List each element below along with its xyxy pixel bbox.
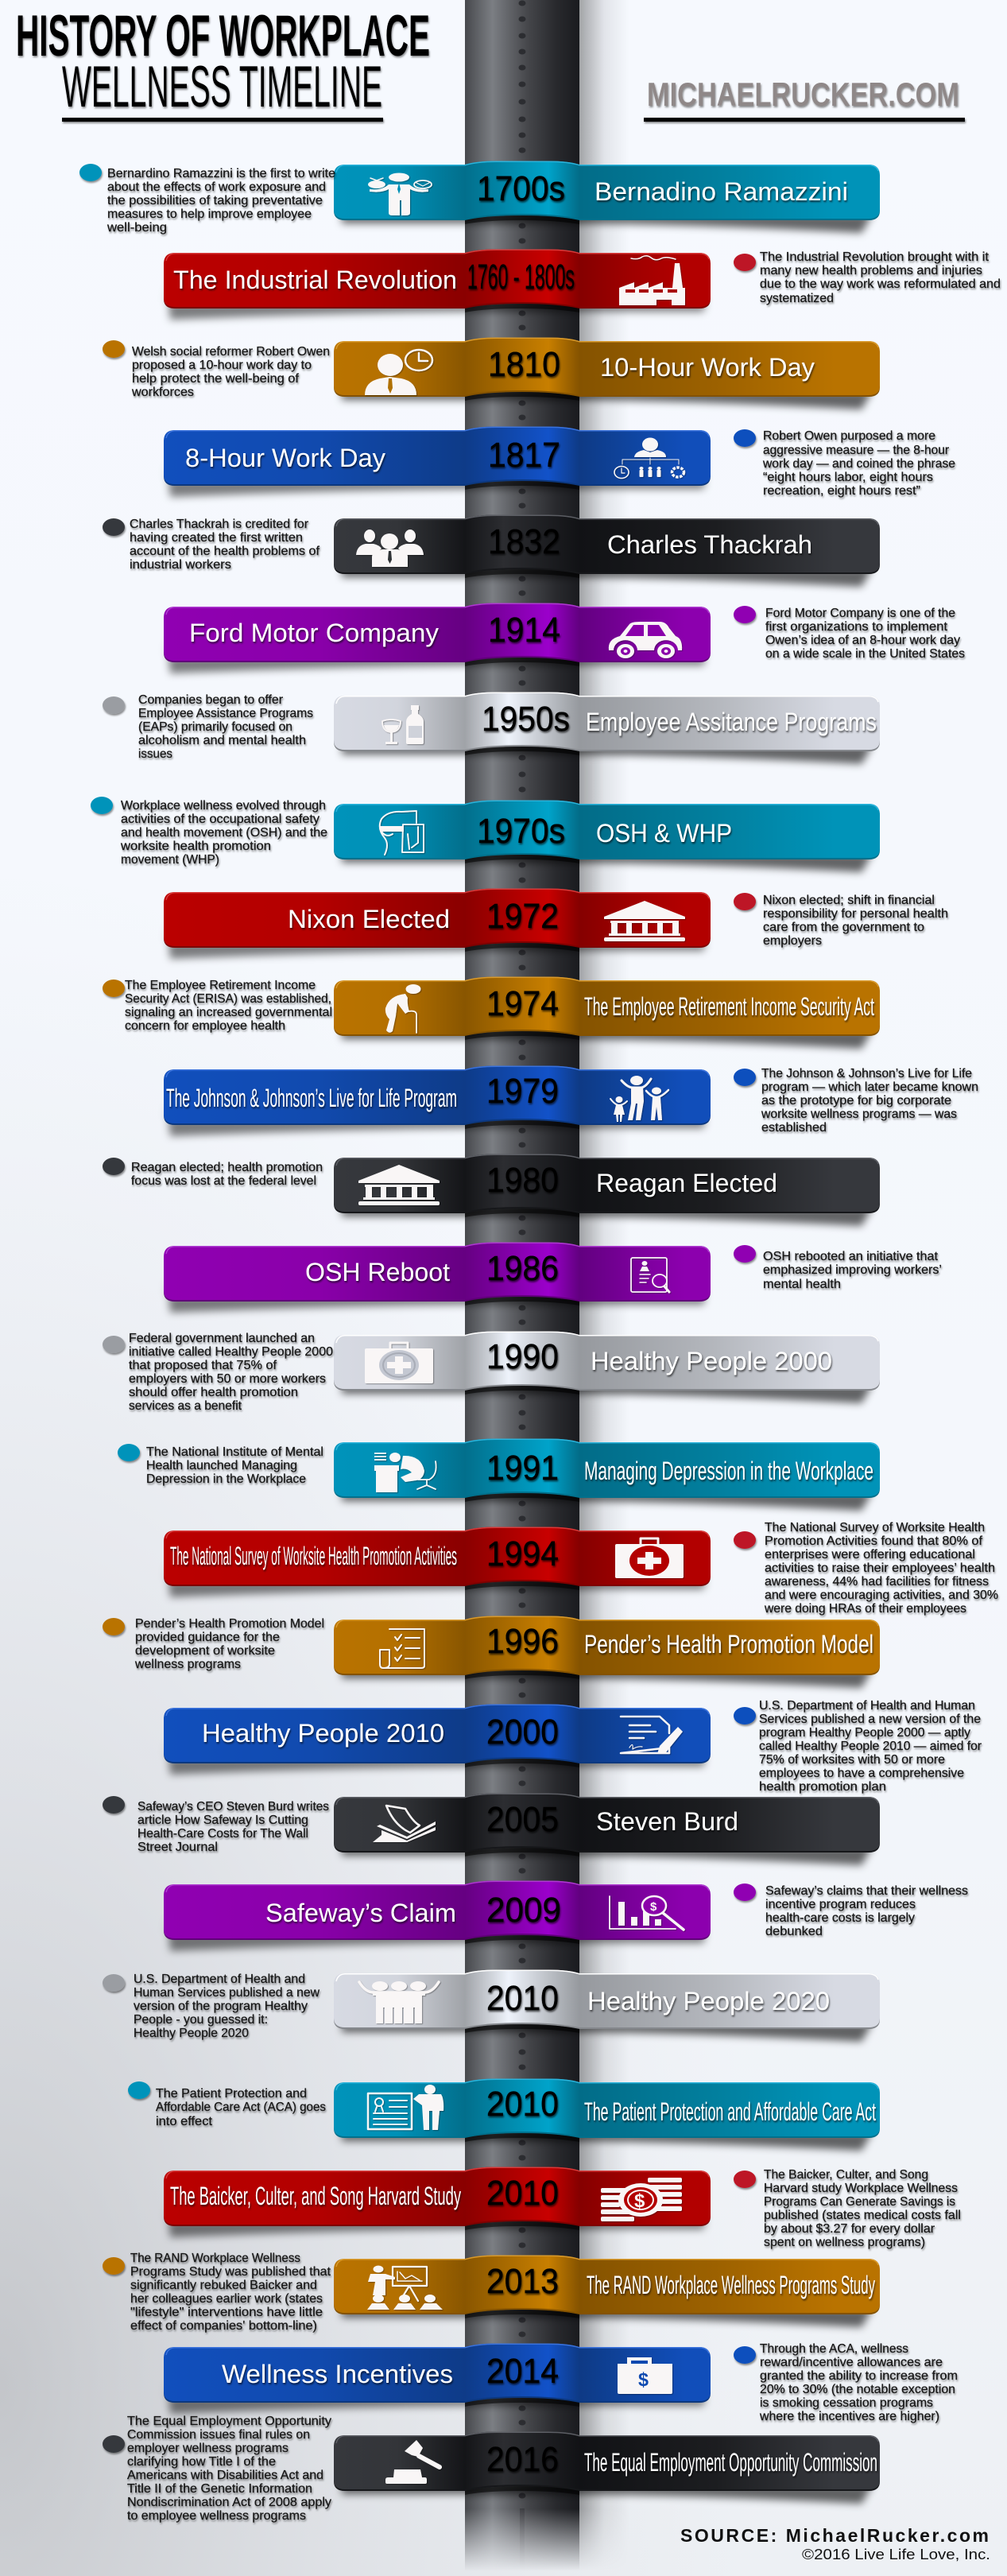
banner — [334, 692, 880, 764]
description: having created the first written — [130, 531, 303, 545]
description: were doing HRAs of their employees — [764, 1602, 966, 1616]
description — [103, 1332, 333, 1413]
description — [91, 797, 327, 867]
panel: Pender's Health Promotion Model — [103, 1616, 880, 1688]
icon: org chart — [614, 437, 684, 479]
icon: document with magnifier — [631, 1258, 669, 1292]
year: 1832 — [488, 522, 560, 561]
description: Owen’s idea of an 8-hour work day — [765, 634, 960, 647]
description: Americans with Disabilities Act and — [127, 2469, 323, 2482]
heading: 10-Hour Work Day — [600, 353, 815, 382]
icon: gavel — [385, 2440, 440, 2484]
banner — [334, 1331, 880, 1403]
description: Programs Study was published that — [130, 2265, 331, 2279]
description: incentive program reduces — [765, 1898, 916, 1911]
panel: OSH Reboot — [164, 1242, 942, 1313]
heading: The Baicker, Culter, and Song Harvard Study — [170, 2182, 461, 2210]
description: The Patient Protection and — [156, 2087, 307, 2101]
description: Ford Motor Company is one of the — [765, 607, 955, 620]
year: 2000 — [486, 1713, 559, 1752]
description: Human Services published a new — [134, 1986, 320, 2000]
description: employers — [763, 934, 822, 948]
description: Employee Assistance Programs — [138, 707, 313, 720]
description — [734, 1699, 982, 1794]
description: movement (WHP) — [121, 853, 219, 867]
description: services as a benefit — [129, 1399, 242, 1413]
banner — [334, 1794, 880, 1865]
year: 1990 — [486, 1337, 559, 1376]
year: 2005 — [486, 1800, 559, 1839]
description: where the incentives are higher) — [759, 2410, 939, 2423]
heading: Reagan Elected — [596, 1169, 777, 1197]
description: alcoholism and mental health — [138, 734, 306, 747]
heading: Nixon Elected — [288, 905, 450, 933]
description: worksite health promotion — [120, 840, 271, 853]
icon: document and pen — [621, 1717, 683, 1754]
description: The Equal Employment Opportunity — [127, 2415, 331, 2428]
heading: Charles Thackrah — [607, 530, 812, 559]
description: Services published a new version of the — [759, 1713, 981, 1726]
description: employer wellness programs — [127, 2442, 289, 2455]
icon: group of people arms linked — [359, 1981, 439, 2023]
panel: ERISA — [103, 976, 880, 1049]
icon: briefcase with dollar: $ — [638, 2369, 649, 2391]
year: 1996 — [486, 1622, 559, 1661]
description — [103, 1158, 323, 1188]
panel: Healthy People 2020 — [103, 1970, 880, 2042]
description: Bernardino Ramazzini is the first to write — [107, 167, 335, 180]
title: WELLNESS TIMELINE — [62, 55, 382, 119]
description: Robert Owen purposed a more — [763, 429, 935, 443]
description: Security Act (ERISA) was established, — [125, 992, 331, 1006]
description — [103, 2415, 331, 2523]
banner — [334, 1154, 880, 1226]
description: article How Safeway Is Cutting — [137, 1814, 308, 1827]
description: 75% of worksites with 50 or more — [759, 1753, 945, 1767]
panel: RAND Workplace Wellness Programs Study — [103, 2252, 880, 2333]
icon: chart with magnifier: $ — [650, 1900, 657, 1914]
heading: 8-Hour Work Day — [185, 444, 385, 472]
panel: Safeway's Claim — [164, 1881, 968, 1951]
description: by about $3.27 for every dollar — [764, 2222, 935, 2236]
panel: Affordable Care Act — [128, 2078, 880, 2151]
heading: The Industrial Revolution — [173, 266, 457, 294]
icon: elderly person with cane — [385, 984, 421, 1033]
year: 2010 — [486, 1979, 559, 2018]
description — [103, 340, 330, 399]
description — [103, 693, 313, 761]
heading: The Johnson & Johnson’s Live for Life Program — [166, 1084, 457, 1112]
description: development of worksite — [135, 1644, 275, 1658]
description — [103, 1973, 320, 2040]
heading: Employee Assitance Programs — [586, 708, 877, 736]
description: responsibility for personal health — [763, 907, 948, 921]
description — [128, 2081, 326, 2128]
description — [103, 1617, 324, 1671]
panel: Equal Employment Opportunity Commission — [103, 2415, 880, 2523]
description: The RAND Workplace Wellness — [130, 2252, 300, 2265]
description: published (states medical costs fall — [764, 2209, 961, 2222]
description: account of the health problems of — [130, 545, 320, 558]
icon: slumped person at desk — [374, 1453, 436, 1492]
icon: wine glass and bottle — [382, 705, 424, 744]
description: help protect the well-being of — [132, 372, 300, 386]
panel: Managing Depression — [118, 1439, 880, 1511]
description: Promotion Activities found that 80% of — [765, 1534, 983, 1548]
year: 1994 — [486, 1534, 559, 1573]
description: The Industrial Revolution brought with it — [760, 250, 990, 264]
description: Commission issues final rules on — [127, 2428, 310, 2442]
description: is smoking cessation programs — [760, 2396, 933, 2410]
description: issues — [138, 747, 172, 761]
banner — [164, 1065, 711, 1136]
description: proposed a 10-hour work day to — [132, 359, 312, 372]
description — [734, 250, 1001, 305]
description: Through the ACA, wellness — [760, 2342, 908, 2356]
icon: head and document — [380, 811, 424, 855]
description — [118, 1444, 323, 1486]
title — [16, 4, 430, 122]
description: Healthy People 2020 — [134, 2027, 249, 2040]
panel: Ford Motor Company — [164, 603, 965, 673]
description: industrial workers — [130, 558, 231, 572]
heading: Wellness Incentives — [222, 2360, 453, 2388]
description: U.S. Department of Health and Human — [759, 1699, 975, 1713]
description — [103, 2252, 331, 2333]
description: about the effects of work exposure and — [107, 180, 326, 194]
description: Title II of the Genetic Information — [127, 2482, 312, 2496]
icon: businessman weighing money and mail — [368, 173, 432, 215]
description: Workplace wellness evolved through — [121, 799, 326, 813]
description: care from the government to — [763, 921, 924, 934]
description: concern for employee health — [125, 1019, 285, 1033]
description: The National Institute of Mental — [146, 1445, 323, 1459]
banner — [334, 976, 880, 1049]
banner — [164, 1881, 711, 1951]
description: The National Survey of Worksite Health — [765, 1521, 985, 1534]
banner — [334, 161, 880, 233]
description: Health-Care Costs for The Wall — [137, 1827, 308, 1841]
icon: family — [610, 1076, 668, 1122]
description: Pender’s Health Promotion Model — [135, 1617, 324, 1631]
year: 2009 — [486, 1891, 561, 1930]
description: activities of the occupational safety — [121, 813, 320, 826]
description: Safeway’s CEO Steven Burd writes — [137, 1800, 329, 1814]
description: initiative called Healthy People 2000 — [129, 1345, 333, 1359]
panel: Charles Thackrah — [103, 515, 880, 587]
banner — [164, 1242, 711, 1313]
description: wellness programs — [134, 1658, 241, 1671]
heading: OSH Reboot — [305, 1258, 450, 1286]
description: awareness, 44% had facilities for fitness — [765, 1575, 989, 1589]
icon: government building — [604, 901, 685, 941]
icon: first aid kit — [615, 1538, 684, 1578]
icon: government building — [358, 1165, 440, 1205]
heading: OSH & WHP — [596, 819, 732, 848]
icon: first aid kit — [365, 1343, 433, 1383]
icon: coins and dollar: $ — [634, 2190, 645, 2212]
year: 1970s — [477, 812, 565, 851]
description: first organizations to implement — [765, 620, 948, 634]
description: significantly rebuked Baicker and — [130, 2279, 317, 2292]
description — [734, 2342, 958, 2423]
source credit: SOURCE: MichaelRucker.com — [680, 2525, 989, 2546]
description: version of the program Healthy — [134, 2000, 308, 2013]
year: 2014 — [486, 2352, 559, 2391]
year: 1974 — [486, 984, 559, 1023]
icon: briefcase with dollar — [618, 2357, 672, 2394]
banner — [334, 1616, 880, 1688]
year: 1986 — [486, 1249, 559, 1288]
description: employees to have a comprehensive — [759, 1767, 964, 1780]
panel: 8-Hour Work Day — [164, 426, 955, 498]
banner — [164, 2344, 711, 2414]
description: worksite wellness programs — was — [761, 1108, 957, 1121]
panel: Healthy People 2010 — [164, 1699, 982, 1794]
description: Companies began to offer — [138, 693, 284, 707]
description: employers with 50 or more workers — [129, 1372, 326, 1386]
description: Affordable Care Act (ACA) goes — [156, 2101, 326, 2114]
description — [734, 1884, 968, 1938]
heading: Healthy People 2020 — [587, 1987, 830, 2015]
panel: Nixon Elected — [164, 889, 948, 959]
source credit — [680, 2525, 990, 2562]
description: health-care costs is largely — [765, 1911, 915, 1925]
description: work day — and coined the phrase — [762, 457, 955, 471]
description: (EAPs) primarily focused on — [138, 720, 292, 734]
heading: Bernadino Ramazzini — [595, 177, 848, 206]
description — [103, 518, 320, 572]
panel: Baicker, Culter, and Song Harvard Study — [164, 2167, 961, 2249]
description — [103, 979, 332, 1033]
year: 1817 — [488, 436, 560, 475]
year: 2010 — [486, 2174, 559, 2213]
description: Depression in the Workplace — [146, 1472, 306, 1486]
heading: Ford Motor Company — [189, 619, 439, 647]
year: 2013 — [486, 2262, 559, 2301]
banner — [334, 337, 880, 409]
description: due to the way work was reformulated and — [760, 277, 1001, 291]
description: 20% to 30% (the notable exception — [760, 2383, 955, 2396]
banner — [334, 1970, 880, 2042]
description: Charles Thackrah is credited for — [130, 518, 309, 531]
description: reward/incentive allowances are — [760, 2356, 943, 2369]
description: emphasized improving workers’ — [763, 1263, 942, 1277]
description: health promotion plan — [759, 1780, 886, 1794]
description: enterprises were offering educational — [765, 1548, 975, 1562]
description: workforces — [131, 386, 194, 399]
banner — [334, 1439, 880, 1511]
panel: Steven Burd — [103, 1794, 880, 1865]
heading: Steven Burd — [596, 1807, 738, 1836]
year: 1950s — [482, 700, 570, 739]
description — [734, 1521, 998, 1616]
icon: chart with magnifier — [610, 1896, 684, 1930]
description: the possibilities of taking preventative — [107, 194, 323, 208]
banner — [164, 2167, 711, 2237]
panel: 1700s Bernardino Ramazzini — [79, 161, 880, 235]
panel: 10-Hour Work Day — [103, 337, 880, 409]
year: 1980 — [486, 1161, 559, 1200]
description: debunked — [765, 1925, 823, 1938]
description: to employee wellness programs — [127, 2509, 306, 2523]
banner — [164, 250, 711, 320]
description: “eight hours labor, eight hours — [763, 471, 933, 484]
panel: Employee Assistance Programs — [103, 692, 880, 764]
banner — [334, 2255, 880, 2327]
description: effect of companies' bottom-line) — [130, 2319, 317, 2333]
heading: Pender’s Health Promotion Model — [584, 1630, 873, 1658]
icon: three professionals — [356, 530, 424, 567]
description: Health launched Managing — [146, 1459, 297, 1472]
year: 2016 — [486, 2440, 559, 2479]
description: clarifying how Title I of the — [127, 2455, 276, 2469]
description: Welsh social reformer Robert Owen — [132, 345, 330, 359]
description: that proposed that 75% of — [129, 1359, 277, 1372]
description: called Healthy People 2010 — aimed for — [759, 1740, 982, 1753]
description — [103, 1796, 329, 1854]
description: her colleagues earlier work (states — [130, 2292, 323, 2306]
icon: person with clock — [365, 350, 432, 395]
description: provided guidance for the — [135, 1631, 280, 1644]
description: established — [761, 1121, 827, 1135]
year: 1914 — [488, 611, 560, 650]
panel: Wellness Incentives — [164, 2342, 958, 2423]
banner — [164, 1705, 711, 1775]
description: mental health — [763, 1278, 841, 1291]
banner — [164, 889, 711, 959]
heading: Healthy People 2010 — [202, 1719, 444, 1748]
description: program Healthy People 2000 — aptly — [759, 1726, 970, 1740]
description: activities to raise their employees’ health — [765, 1562, 995, 1575]
year: 1760 - 1800s — [467, 258, 575, 297]
description: Street Journal — [137, 1841, 218, 1854]
description — [734, 606, 965, 661]
year: 1972 — [486, 897, 559, 936]
banner — [334, 800, 880, 872]
panel: Healthy People 2000 — [103, 1331, 880, 1413]
description: well-being — [107, 221, 167, 235]
description — [734, 2168, 961, 2249]
description: focus was lost at the federal level — [131, 1174, 316, 1188]
icon: certificate and man — [368, 2085, 443, 2130]
description: Reagan elected; health promotion — [131, 1161, 323, 1174]
description: systematized — [760, 292, 834, 305]
description: The Baicker, Culter, and Song — [764, 2168, 928, 2182]
icon: car — [609, 622, 682, 658]
timeline pole — [465, 0, 629, 2576]
description: spent on wellness programs) — [764, 2236, 925, 2249]
panel: OSH & WHP — [91, 797, 880, 872]
description: Programs Can Generate Savings is — [764, 2195, 955, 2209]
description: recreation, eight hours rest” — [763, 484, 920, 498]
year: 1991 — [486, 1449, 559, 1488]
description: granted the ability to increase from — [760, 2369, 958, 2383]
description: Nondiscrimination Act of 2008 apply — [127, 2496, 331, 2509]
banner — [334, 2078, 880, 2151]
description: and health movement (OSH) and the — [121, 826, 327, 840]
description: The Johnson & Johnson’s Live for Life — [761, 1067, 972, 1080]
heading: Safeway’s Claim — [265, 1899, 456, 1927]
panel: Johnson & Johnson — [164, 1065, 978, 1136]
source credit: ©2016 Live Life Love, Inc. — [802, 2547, 990, 2562]
description: many new health problems and injuries — [760, 264, 982, 277]
title: HISTORY OF WORKPLACE — [16, 4, 430, 68]
icon: checklist — [380, 1629, 424, 1668]
description: The Employee Retirement Income — [125, 979, 316, 992]
description: People - you guessed it: — [134, 2013, 268, 2027]
year: 1810 — [488, 345, 560, 384]
panel: National Survey 1994: The National Survey of Worksite Health Promotion Activities — [170, 1542, 457, 1570]
year: 1700s — [477, 169, 565, 208]
heading: Healthy People 2000 — [591, 1347, 832, 1375]
icon: factory — [619, 256, 685, 305]
banner — [334, 2431, 880, 2504]
description: Federal government launched an — [129, 1332, 315, 1345]
description: signaling an increased governmental — [125, 1006, 332, 1019]
icon: stack of papers — [373, 1806, 436, 1842]
description: OSH rebooted an initiative that — [763, 1250, 939, 1263]
banner — [164, 603, 711, 673]
year: 1979 — [486, 1072, 559, 1111]
year: 2010 — [486, 2085, 559, 2124]
description: "lifestyle" interventions have little — [130, 2306, 323, 2319]
description: measures to help improve employee — [107, 208, 312, 221]
description: on a wide scale in the United States — [765, 647, 965, 661]
banner — [164, 426, 711, 497]
description: U.S. Department of Health and — [134, 1973, 305, 1986]
description — [734, 1067, 978, 1135]
description: into effect — [156, 2115, 213, 2128]
description: Safeway’s claims that their wellness — [765, 1884, 968, 1898]
description: as the prototype for big corporate — [761, 1094, 951, 1108]
description: program — which later became known — [761, 1080, 978, 1094]
panel: Industrial Revolution — [164, 250, 1001, 320]
description — [79, 164, 335, 235]
banner — [164, 1527, 711, 1597]
description — [734, 1245, 942, 1291]
description: Harvard study Workplace Wellness — [764, 2182, 958, 2195]
description: should offer health promotion — [129, 1386, 298, 1399]
panel: Reagan Elected — [103, 1154, 880, 1226]
banner — [334, 515, 880, 587]
description: and were encouraging activities, and 30% — [765, 1589, 998, 1602]
icon: presenter and audience — [367, 2266, 443, 2310]
description — [734, 893, 948, 948]
description: Nixon elected; shift in financial — [763, 894, 935, 907]
description: aggressive measure — the 8-hour — [763, 444, 950, 457]
description — [734, 429, 955, 498]
icon: coins and dollar — [601, 2178, 682, 2221]
panel: National Survey 1994 — [164, 1521, 998, 1616]
